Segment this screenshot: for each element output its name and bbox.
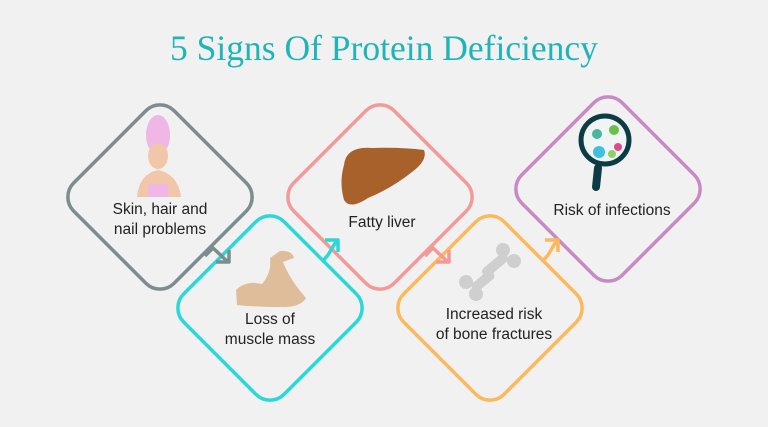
panel: muscle [170,208,370,408]
arrow: cyan [322,240,338,262]
arrow: orange [542,240,558,262]
text: fatty liver: Fatty liver [348,214,416,231]
panel: skin hair nail [60,97,260,297]
title: 5 Signs Of Protein Deficiency [170,28,598,68]
arrow: gray [205,248,229,262]
icon: woman with towel [137,115,181,197]
icon: broken bone [459,243,521,301]
panel: bone fractures [390,208,590,408]
text: infections: Risk of infections [553,202,671,219]
panel: bone fractures: of bone fractures [436,326,552,343]
panel: skin hair nail: nail problems [114,221,206,238]
panel: muscle: muscle mass [225,331,315,348]
panel: fatty liver [280,97,480,297]
icon: liver [342,148,425,205]
icon: flexed arm [236,251,306,307]
icon: magnifier [581,116,629,187]
text: skin: Skin, hair and [113,201,207,218]
panel: infections [508,89,708,289]
arrow: pink [425,248,449,262]
text: bones: Increased risk [446,306,542,323]
text: muscle: Loss of [245,311,296,328]
